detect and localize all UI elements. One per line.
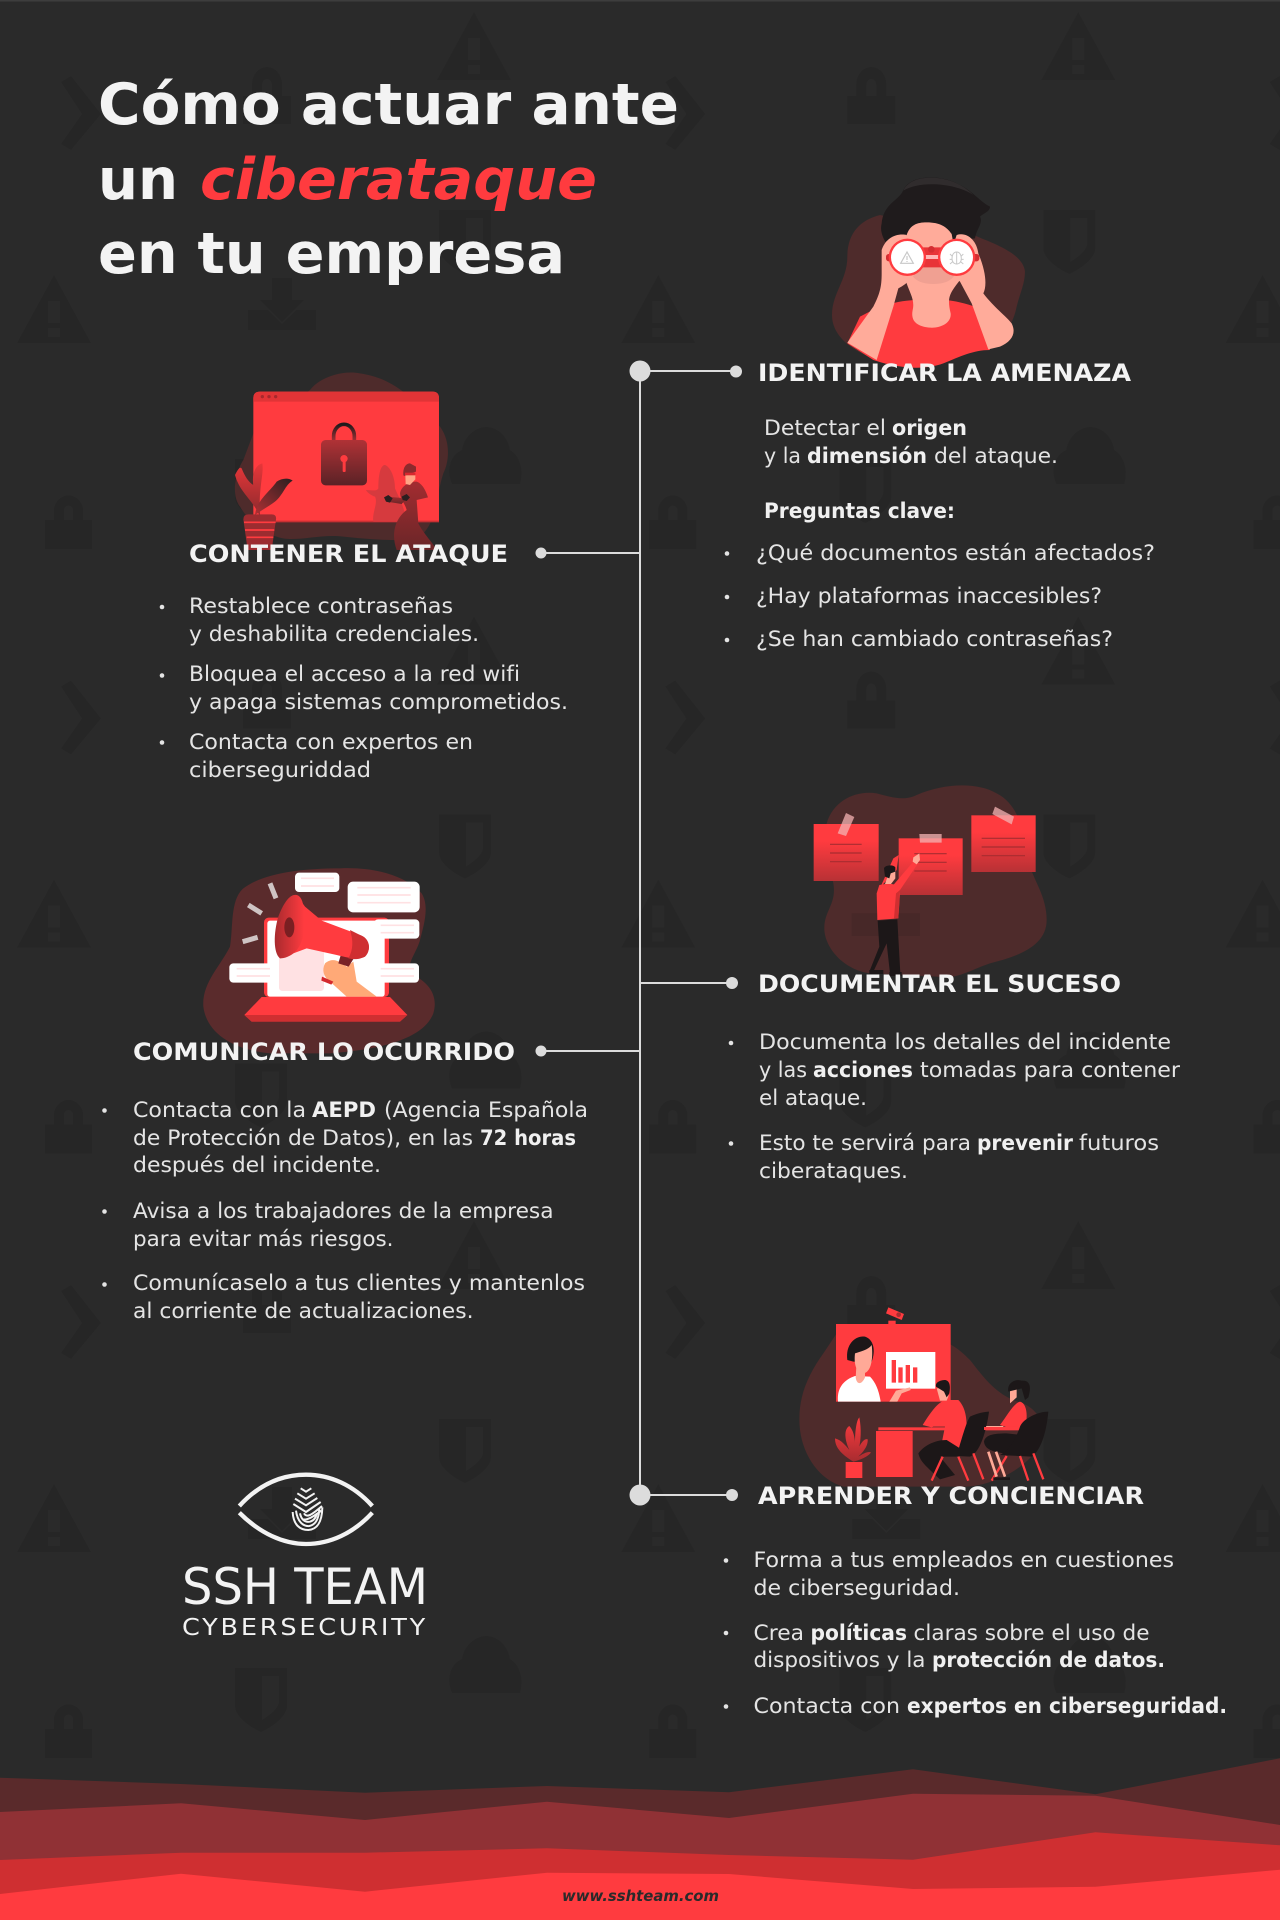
bullet list: después del incidente. (133, 1153, 381, 1178)
timeline end node (630, 1484, 650, 1506)
bullet list (160, 594, 568, 783)
bullet list: acciones (813, 1058, 913, 1083)
bullet list: ciberataques. (759, 1159, 908, 1184)
bullet list: Avisa a los trabajadores de la empresa (133, 1199, 554, 1224)
logo: SSH Team Cybersecurity (182, 1475, 428, 1641)
question list: ¿Qué documentos están afectados? (756, 541, 1155, 566)
question list: ¿Se han cambiado contraseñas? (756, 627, 1113, 652)
bullet list: AEPD (312, 1098, 376, 1123)
illustration: megaphone on laptop (203, 868, 435, 1053)
bullet list: expertos en ciberseguridad. (907, 1694, 1227, 1719)
bullet list: Bloquea el acceso a la red wifi (189, 662, 520, 687)
bullet list: de Protección de Datos), en las (133, 1126, 473, 1151)
icon: eye with fingerprint (239, 1475, 372, 1544)
bullet list: políticas (810, 1621, 907, 1646)
intro text: Detectar el (764, 416, 886, 441)
illustration: locked browser window with thief (235, 372, 448, 550)
bullet list: (Agencia Española (384, 1098, 588, 1123)
bullet list: claras sobre el uso de (914, 1621, 1150, 1646)
bullet list: ciberseguriddad (189, 758, 371, 783)
connector: aprender (640, 1489, 738, 1501)
title: ciberataque (200, 147, 597, 213)
question list (725, 541, 1155, 652)
panel: identificar la amenaza (725, 359, 1155, 652)
bullet list: Comunícaselo a tus clientes y mantenlos (133, 1271, 585, 1296)
heading: APRENDER Y CONCIENCIAR (758, 1482, 1144, 1510)
bullet list: Contacta con (754, 1694, 900, 1719)
bullet list: 72 horas (480, 1126, 576, 1151)
panel: aprender y concienciar (724, 1482, 1227, 1719)
intro text: y la (764, 444, 801, 469)
bullet list (724, 1548, 1227, 1719)
bullet list: Restablece contraseñas (189, 594, 453, 619)
bullet list: al corriente de actualizaciones. (133, 1299, 474, 1324)
bullet list: Contacta con la (133, 1098, 306, 1123)
intro text (764, 416, 1058, 469)
intro text: del ataque. (934, 444, 1058, 469)
bullet list: futuros (1079, 1131, 1159, 1156)
question list: ¿Hay plataformas inaccesibles? (756, 584, 1102, 609)
bullet list: y apaga sistemas comprometidos. (189, 690, 568, 715)
heading: COMUNICAR LO OCURRIDO (133, 1038, 515, 1066)
bullet list: para evitar más riesgos. (133, 1227, 394, 1252)
intro text: dimensión (807, 444, 927, 469)
intro text: origen (892, 416, 967, 441)
bullet list: Esto te servirá para (759, 1131, 971, 1156)
bullet list: Contacta con expertos en (189, 730, 473, 755)
timeline (536, 360, 742, 1506)
heading: IDENTIFICAR LA AMENAZA (758, 359, 1131, 387)
website url: www.sshteam.com (562, 1887, 719, 1905)
illustration: person posting notes (814, 785, 1047, 977)
bullet list: dispositivos y la (754, 1648, 926, 1673)
bullet list: Crea (754, 1621, 804, 1646)
title: un (98, 147, 178, 213)
bullet list: Forma a tus empleados en cuestiones (754, 1548, 1174, 1573)
tagline: CYBERSECURITY (182, 1615, 428, 1641)
panel: documentar el suceso (729, 970, 1180, 1184)
title (98, 72, 679, 287)
footer waves (0, 1758, 1280, 1920)
bullet list: prevenir (977, 1131, 1073, 1156)
bullet list: el ataque. (759, 1086, 867, 1111)
heading: DOCUMENTAR EL SUCESO (758, 970, 1121, 998)
bullet list: y las (759, 1058, 807, 1083)
title: Cómo actuar ante (98, 72, 679, 138)
bullet list (102, 1098, 588, 1324)
connector: identificar (640, 366, 742, 378)
bullet list: tomadas para contener (920, 1058, 1180, 1083)
title: en tu empresa (98, 221, 565, 287)
connector: contener (536, 548, 640, 558)
bullet list: Documenta los detalles del incidente (759, 1030, 1171, 1055)
illustration: person with binoculars (832, 177, 1025, 368)
panel: contener el ataque (160, 540, 568, 783)
bullet list: de ciberseguridad. (754, 1576, 960, 1601)
illustration: training meeting (799, 1307, 1048, 1487)
wordmark: SSH TEAM (182, 1558, 428, 1616)
subheading: Preguntas clave: (764, 499, 955, 524)
heading: CONTENER EL ATAQUE (189, 540, 508, 568)
bullet list: y deshabilita credenciales. (189, 622, 479, 647)
panel: comunicar lo ocurrido (102, 1038, 588, 1324)
connector: documentar (640, 977, 738, 989)
bullet list: protección de datos. (932, 1648, 1165, 1673)
timeline start node (630, 360, 650, 382)
bullet list (729, 1030, 1180, 1184)
connector: comunicar (536, 1046, 640, 1056)
